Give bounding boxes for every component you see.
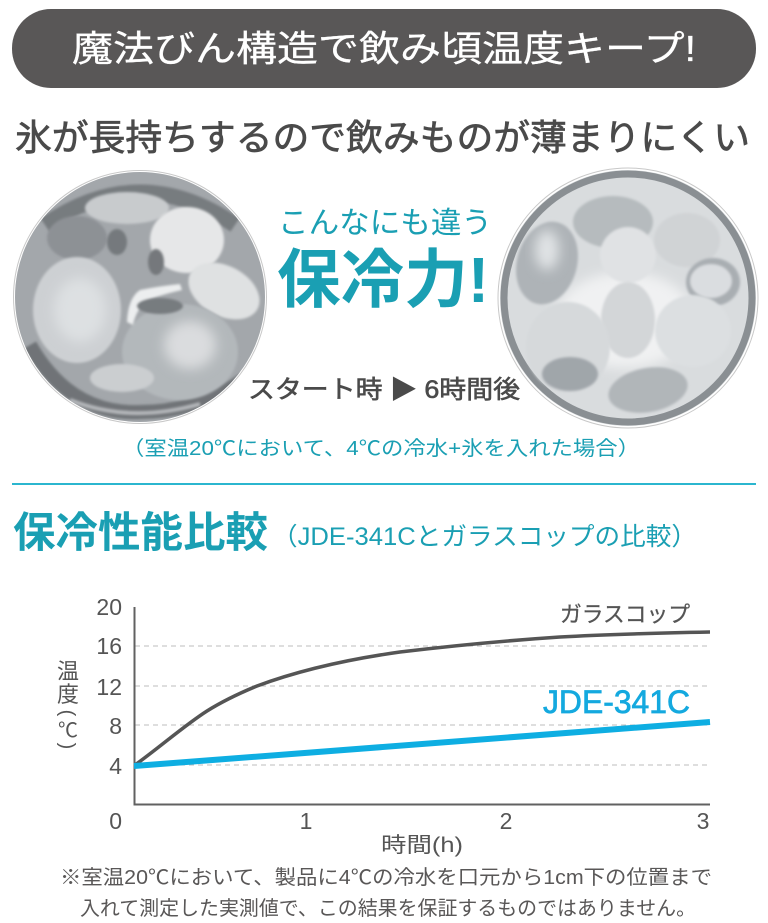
x axis title: 時間(h) [381,834,463,857]
line chart [56,594,710,857]
photo: ice after 6 hours [495,168,761,430]
y axis labels [96,594,122,834]
line: glass cup [135,632,710,765]
x axis labels: 2 [500,808,512,834]
photo: ice at start [10,170,270,425]
footnote: 入れて測定した実測値で、この結果を保証するものではありません。 [80,897,696,920]
y axis title [56,659,79,749]
x axis labels [300,808,709,834]
footnote [60,866,712,920]
title banner [12,9,756,88]
y axis labels: 0 [109,808,122,834]
x axis labels: 3 [697,808,709,834]
callout: different cold retention [277,207,492,316]
label: JDE-341C: JDE-341C [543,684,690,720]
condition note: （室温20℃において、4℃の冷水+氷を入れた場合） [122,437,640,460]
caption: start to six hours: スタート時 ▶ 6時間後 [248,376,520,404]
heading: 氷が長持ちするので飲みものが薄まりにくい [15,117,750,158]
y axis labels: 4 [109,753,122,779]
footnote: ※室温20℃において、製品に4℃の冷水を口元から1cm下の位置まで [60,866,712,889]
line: JDE-341C [134,722,710,766]
section heading: （JDE-341Cとガラスコップの比較） [272,523,697,551]
x axis labels: 1 [300,808,312,834]
callout: different cold retention: こんなにも違う [278,207,492,240]
y axis labels: 16 [96,633,122,659]
y axis title: ℃ [58,720,78,742]
label: glass cup: ガラスコップ [560,602,690,627]
y axis title: ) [56,743,78,749]
y axis title: ( [56,710,78,717]
section heading [13,509,697,556]
section heading: 保冷性能比較 [13,509,268,556]
callout: different cold retention: 保冷力! [277,244,489,316]
y axis labels: 8 [109,713,122,739]
y axis title: 温 [57,659,79,684]
y axis labels: 12 [96,674,122,700]
y axis title: 度 [57,682,79,707]
title banner: 魔法びん構造で飲み頃温度キープ! [72,28,696,69]
y axis labels: 20 [96,594,122,620]
